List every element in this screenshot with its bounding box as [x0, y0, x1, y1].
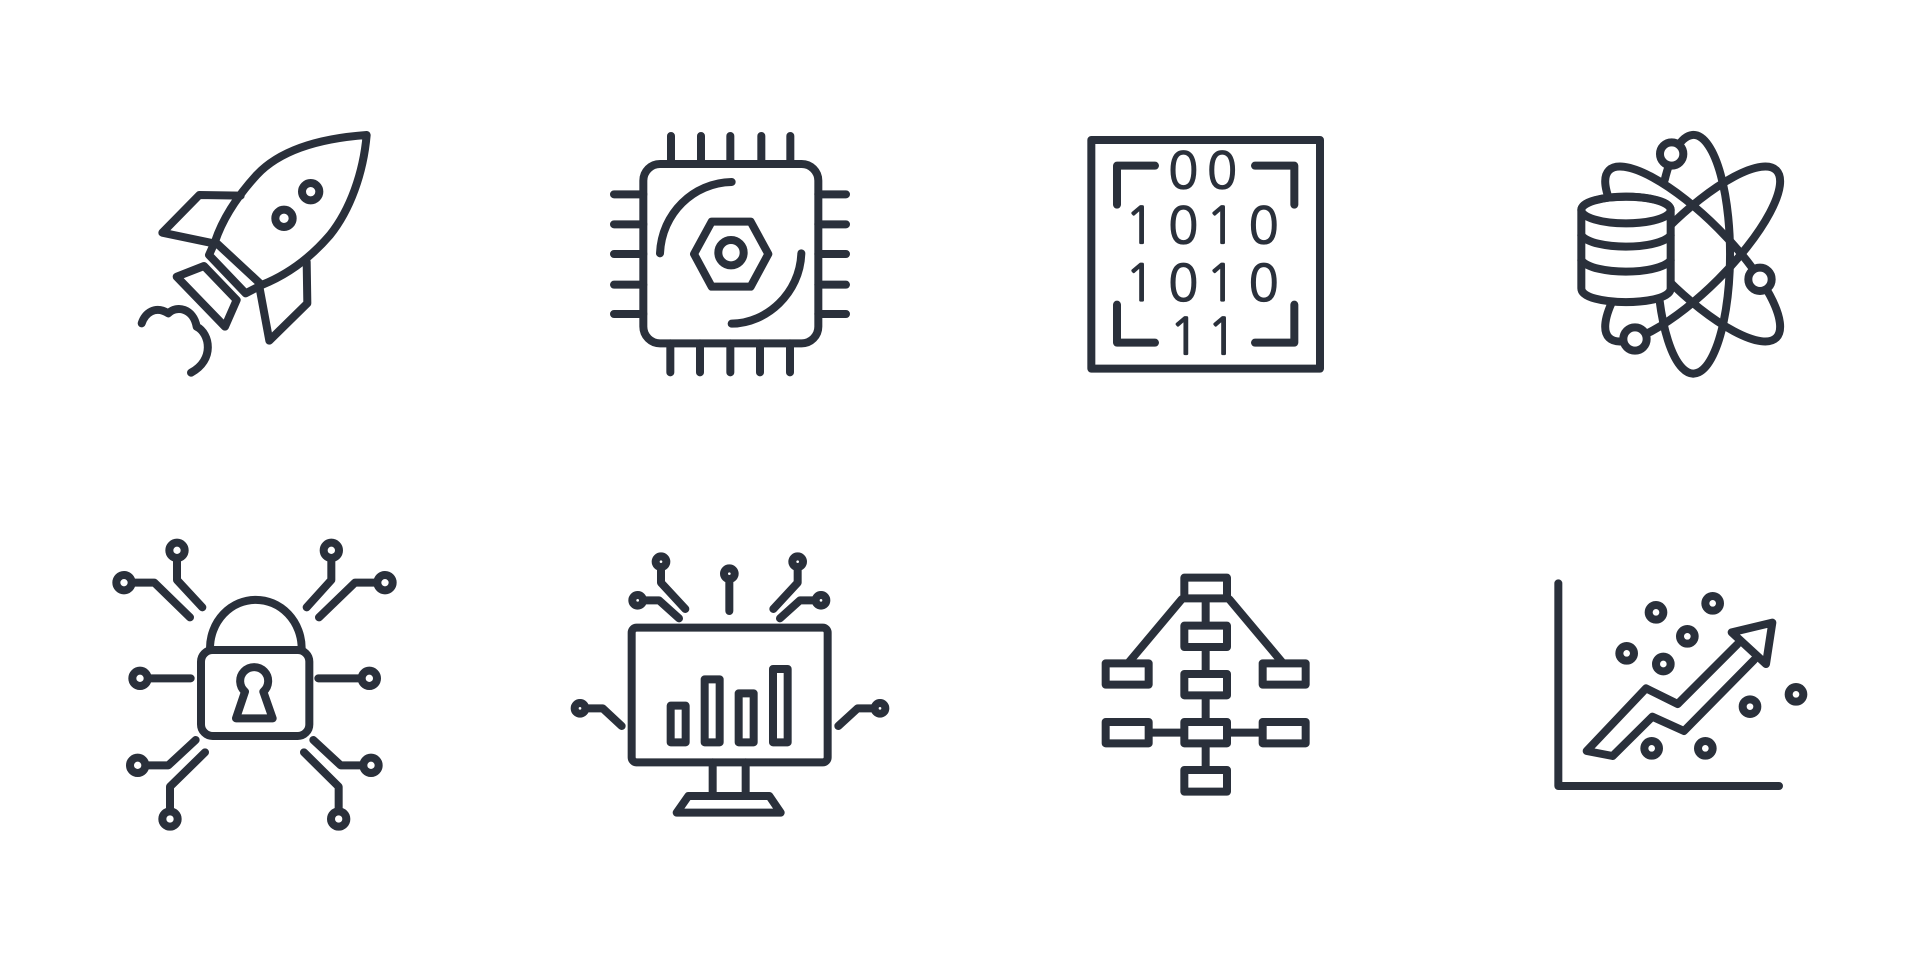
icon: binary code frame: 1 [1206, 259, 1236, 309]
icon: rocket [142, 135, 367, 373]
icon: binary code frame: 0 [1168, 147, 1198, 197]
icon: binary code frame: 1 [1169, 312, 1199, 362]
icon: binary code frame: 0 [1168, 201, 1198, 251]
icon: binary code frame: 0 [1168, 259, 1198, 309]
icon: binary code frame: 1 [1206, 201, 1236, 251]
icon: binary code frame: 1 [1125, 259, 1155, 309]
icon: binary code frame: 0 [1249, 201, 1279, 251]
icon: binary code frame: 1 [1125, 201, 1155, 251]
icon: binary code frame: 0 [1207, 147, 1237, 197]
icon: binary code frame: 1 [1207, 312, 1237, 362]
icon: database with atom orbits [1581, 135, 1802, 374]
icon: growth chart with arrow and scatter dots [1558, 583, 1803, 786]
icon: monitor with bar chart and circuit lines [575, 556, 885, 813]
icon: processor chip [614, 136, 846, 372]
icon: binary code frame: 0 [1249, 259, 1279, 309]
icon: flowchart [1106, 578, 1306, 792]
icon: padlock with circuit lines [116, 543, 393, 827]
icon: binary code frame [1091, 140, 1320, 369]
